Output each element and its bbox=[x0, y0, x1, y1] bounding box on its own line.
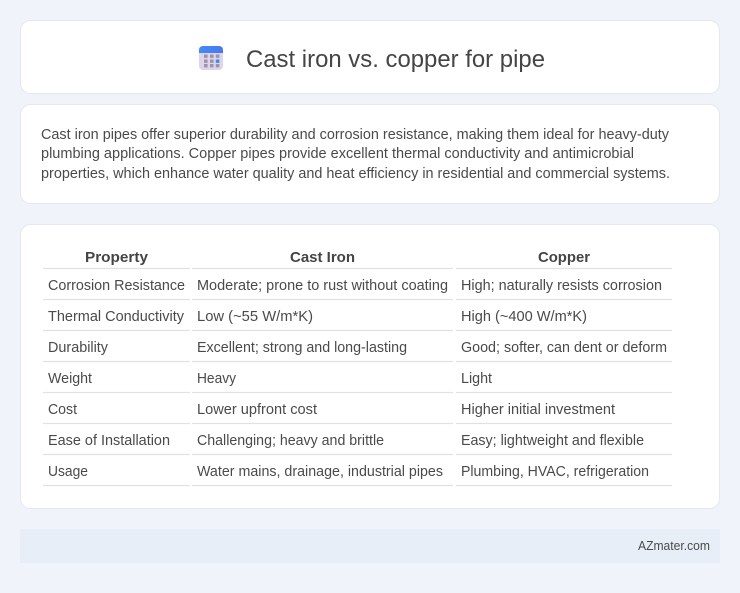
row: weight bbox=[48, 371, 492, 387]
row: cost: Lower upfront cost bbox=[197, 402, 317, 418]
row: weight: Light bbox=[461, 371, 492, 387]
table header: Cast Iron bbox=[290, 249, 355, 266]
row: usage: Water mains, drainage, industrial pipes bbox=[197, 464, 443, 480]
icon: calendar bbox=[199, 46, 223, 70]
footer bar bbox=[20, 529, 720, 563]
row: durability: Good; softer, can dent or deform bbox=[461, 340, 667, 356]
row: thermal conductivity: Thermal Conductivity bbox=[48, 309, 185, 325]
panel: summary bbox=[20, 104, 720, 204]
summary text: Cast iron pipes offer superior durability and corrosion resistance, making them ideal for heavy-duty bbox=[41, 127, 670, 143]
row: thermal conductivity: High (~400 W/m*K) bbox=[461, 309, 587, 325]
row: thermal conductivity: Low (~55 W/m*K) bbox=[197, 309, 313, 325]
row: corrosion resistance: Corrosion Resistance bbox=[48, 278, 185, 294]
summary text: properties, which enhance water quality and heat efficiency in residential and commercial systems. bbox=[41, 166, 670, 182]
row: corrosion resistance: Moderate; prone to rust without coating bbox=[197, 278, 448, 294]
row: usage bbox=[48, 464, 649, 480]
panel: title card bbox=[20, 20, 720, 94]
row: durability: Durability bbox=[48, 340, 109, 356]
row: ease of installation: Challenging; heavy and brittle bbox=[197, 433, 384, 449]
summary text bbox=[41, 127, 670, 182]
title: Cast iron vs. copper for pipe bbox=[246, 46, 545, 73]
table header: Property bbox=[85, 249, 149, 266]
row: durability: Excellent; strong and long-lasting bbox=[197, 340, 407, 356]
row: usage: Usage bbox=[48, 464, 88, 480]
row: ease of installation: Easy; lightweight and flexible bbox=[461, 433, 644, 449]
row: cost bbox=[48, 402, 615, 418]
table header: Copper bbox=[538, 249, 590, 266]
row: durability bbox=[48, 340, 667, 356]
panel: comparison table bbox=[20, 224, 720, 508]
row: corrosion resistance bbox=[48, 278, 662, 294]
row: ease of installation bbox=[48, 433, 644, 449]
row: weight: Weight bbox=[48, 371, 92, 387]
row: cost: Higher initial investment bbox=[461, 402, 615, 418]
footer brand: AZmater.com bbox=[638, 539, 710, 553]
row: corrosion resistance: High; naturally resists corrosion bbox=[461, 278, 662, 294]
table header bbox=[85, 249, 590, 266]
row: ease of installation: Ease of Installation bbox=[48, 433, 170, 449]
row: weight: Heavy bbox=[197, 371, 237, 387]
summary text: plumbing applications. Copper pipes provide excellent thermal conductivity and antimicrobial bbox=[41, 146, 634, 162]
row: thermal conductivity bbox=[48, 309, 587, 325]
row: usage: Plumbing, HVAC, refrigeration bbox=[461, 464, 649, 480]
row: cost: Cost bbox=[48, 402, 77, 418]
